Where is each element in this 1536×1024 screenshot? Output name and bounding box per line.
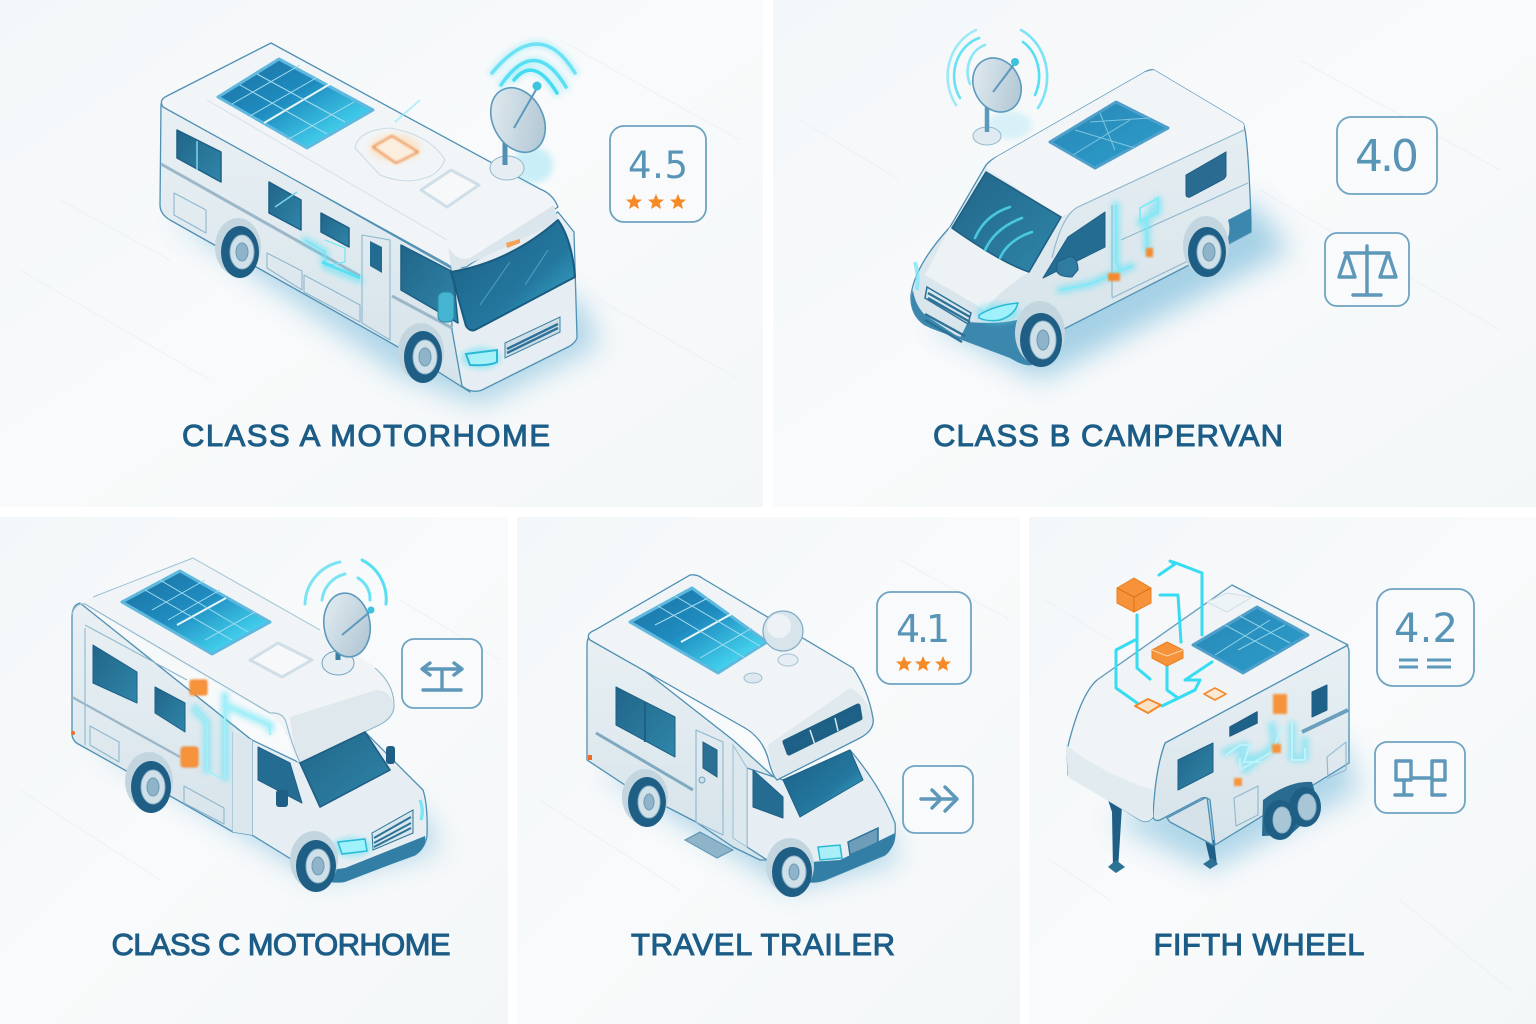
roof vent [1207, 593, 1252, 612]
panel: class c motorhome [0, 517, 508, 1024]
tail light [588, 755, 592, 760]
front cap [448, 205, 558, 272]
title: fifth wheel: FIFTH WHEEL [1154, 927, 1364, 962]
mirror [438, 292, 454, 322]
nose [1067, 585, 1348, 821]
wheels [622, 769, 814, 897]
door [696, 730, 723, 835]
headlight [915, 262, 1020, 323]
side orange nodes [1234, 694, 1287, 786]
door [362, 235, 390, 340]
windshield signal arcs [975, 207, 1032, 258]
roof [588, 575, 873, 780]
lower body [1167, 797, 1213, 845]
stripe [1302, 710, 1348, 732]
rating badge 4.0: 4.0 [1355, 131, 1419, 182]
side panel lines [85, 625, 252, 835]
grille [372, 810, 413, 850]
ground shadow [600, 770, 900, 890]
orange cube 2 [1152, 642, 1183, 666]
stripe [596, 733, 693, 790]
signal waves [948, 30, 1047, 108]
cyan wiring [1060, 198, 1158, 290]
roof vent [250, 643, 312, 677]
icon: network badge [1375, 742, 1465, 813]
vehicle: class b campervan [911, 70, 1251, 367]
ground shadow [930, 200, 1290, 380]
roof cyan circuit [1116, 561, 1212, 706]
rating badge 4.0 [1337, 117, 1437, 194]
wheels [215, 218, 444, 383]
solar panel [218, 59, 373, 148]
side window [1186, 152, 1226, 197]
windshield [451, 220, 575, 330]
roof [986, 70, 1244, 217]
roof [161, 43, 558, 268]
panel: travel trailer [517, 517, 1020, 1024]
windshield [952, 172, 1061, 272]
wheels [125, 752, 338, 892]
ground shadow [170, 215, 600, 405]
panel: class a motorhome [0, 0, 763, 507]
cab pillar [233, 732, 252, 835]
step [685, 832, 733, 858]
rating badge 4.2: 4.2 [1394, 606, 1458, 652]
wheels [1015, 216, 1229, 367]
front face [451, 212, 577, 391]
windows [177, 130, 458, 323]
title: travel trailer: TRAVEL TRAILER [631, 927, 895, 962]
windshield [300, 732, 390, 807]
body side [1152, 645, 1349, 845]
solar panel [122, 571, 270, 654]
hatches [1234, 742, 1346, 826]
flat orange modules [1135, 688, 1226, 713]
vehicle: class c motorhome [71, 558, 427, 892]
pillar [733, 745, 747, 847]
side cyan wiring [1225, 722, 1305, 770]
body side [160, 104, 470, 392]
rating badge 4.2 [1377, 589, 1474, 686]
side stripe [161, 164, 452, 328]
door seam [1112, 205, 1190, 298]
mirror [276, 746, 395, 807]
signal waves [492, 44, 575, 93]
side line [1121, 183, 1248, 240]
title: class b campervan: CLASS B CAMPERVAN [933, 418, 1283, 453]
orange nodes [1108, 248, 1153, 281]
body side [587, 632, 790, 860]
headlight [818, 845, 842, 860]
orange nodes [181, 680, 207, 767]
windows [1178, 685, 1327, 790]
mirror [1057, 256, 1078, 277]
body [911, 70, 1251, 363]
orange module [355, 100, 445, 181]
bumper [800, 833, 895, 882]
hood [925, 227, 1029, 310]
icon: arrow badge [903, 766, 973, 833]
signal waves [305, 560, 386, 604]
solar panel [1050, 102, 1168, 168]
headlight [332, 800, 422, 857]
vehicle: fifth wheel [1066, 561, 1349, 873]
title: class c motorhome: CLASS C MOTORHOME [112, 927, 450, 962]
windows [616, 687, 860, 818]
orange cube 1 [1117, 578, 1151, 612]
cyan wiring [195, 695, 270, 778]
cab front [252, 732, 427, 882]
icon: wide arrows badge [402, 639, 482, 708]
bumper [325, 836, 425, 883]
body side [72, 603, 300, 857]
panel: fifth wheel [1029, 517, 1536, 1024]
rating badge 4.5: 4.5 [628, 144, 688, 187]
vehicle: travel trailer [587, 575, 895, 897]
windows [93, 645, 302, 803]
lower skirt [911, 208, 1251, 365]
ground shadow [90, 740, 440, 880]
headlight [461, 347, 501, 369]
landing legs [1108, 800, 1218, 873]
satellite dish [320, 590, 374, 675]
wheels [1262, 782, 1321, 840]
icon: balance scale [1325, 233, 1409, 306]
rating badge 4.5 [610, 126, 706, 222]
roof dome [744, 611, 803, 683]
panel: class b campervan [773, 0, 1536, 507]
roof line [1097, 585, 1232, 680]
solar panel [1193, 607, 1308, 673]
rating badge 4.1: 4.1 [896, 607, 950, 651]
cab front [747, 750, 895, 882]
satellite dish [964, 49, 1032, 145]
vehicle: class a motorhome [160, 43, 577, 392]
rating badge 4.1 [877, 592, 971, 684]
cab window [1043, 212, 1105, 278]
grille [925, 287, 971, 324]
tail light [71, 731, 75, 735]
ground shadow [1110, 740, 1360, 870]
roof vent [421, 170, 479, 207]
satellite dish [480, 78, 556, 183]
cyan wiring [305, 240, 360, 280]
title: class a motorhome: CLASS A MOTORHOME [182, 418, 550, 453]
storage hatches [174, 193, 360, 322]
amber marker [506, 239, 520, 248]
solar panel [630, 588, 767, 673]
windshield [783, 750, 863, 817]
roof [80, 558, 394, 763]
grille [505, 317, 560, 358]
grille [848, 828, 878, 855]
